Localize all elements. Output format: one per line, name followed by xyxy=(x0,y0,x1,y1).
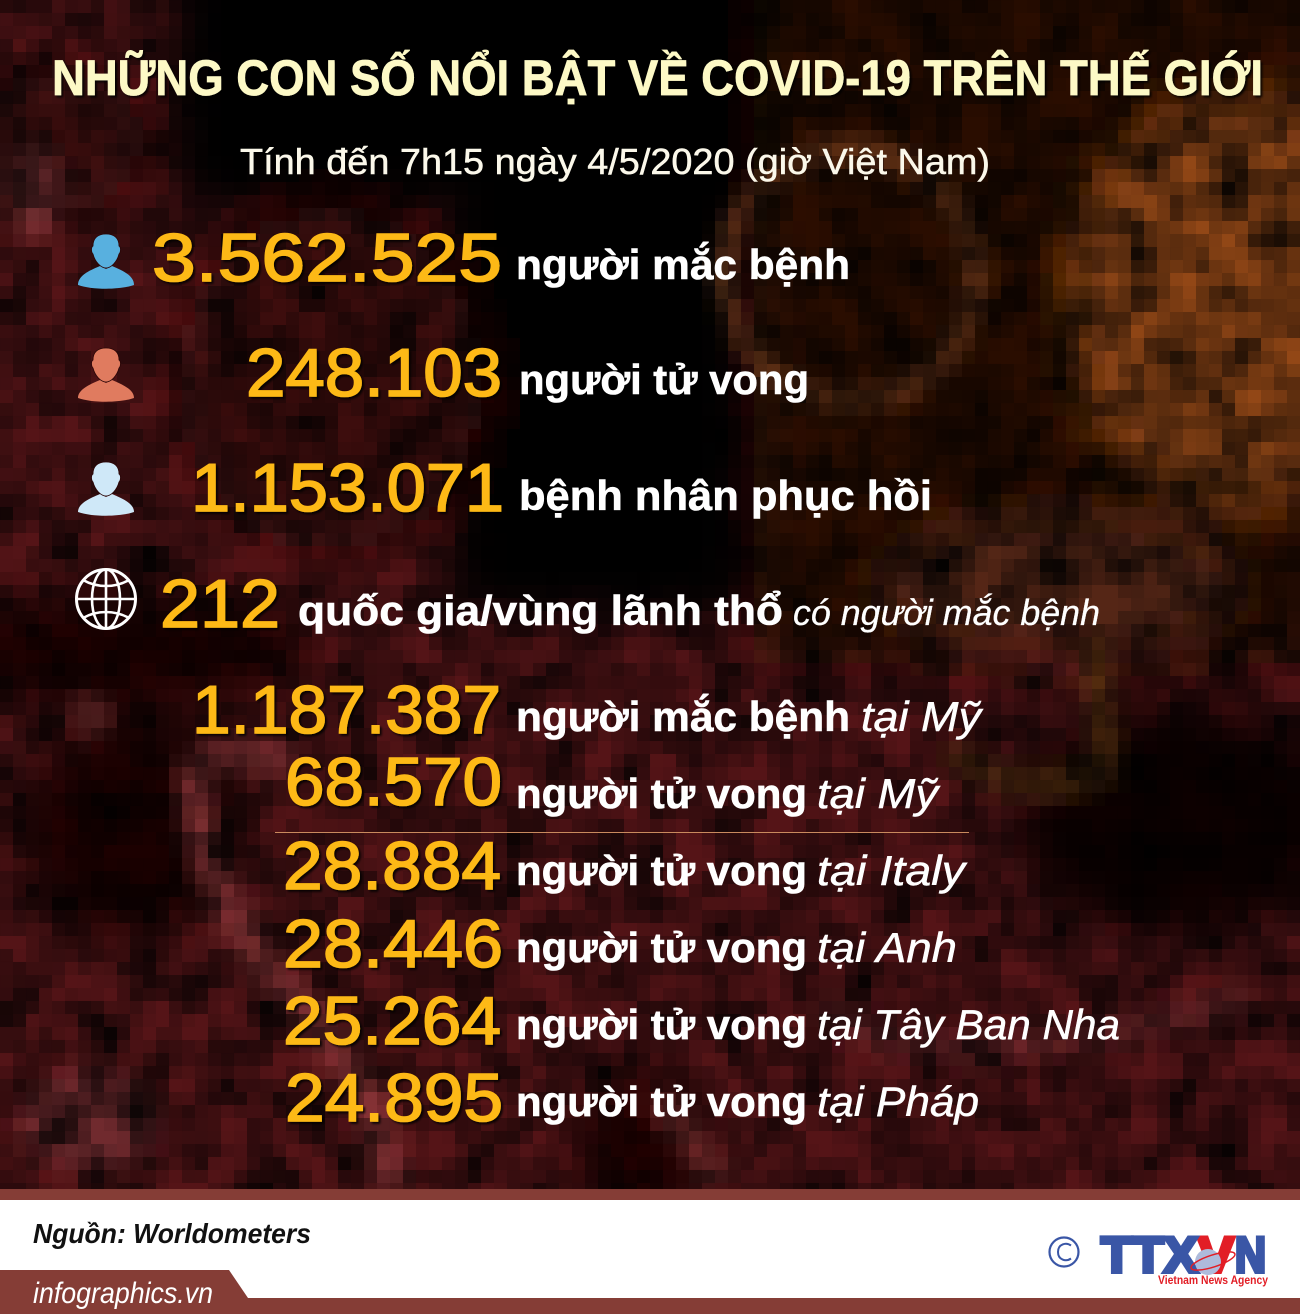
label: Italy: tại Italy xyxy=(817,847,968,894)
label: countries note: có người mắc bệnh xyxy=(793,592,1100,633)
label: recovered: bệnh nhân phục hồi xyxy=(519,472,932,519)
icon: copyright xyxy=(1050,1238,1078,1266)
footer panel xyxy=(0,1200,1300,1314)
number: US cases: 1.187.387 xyxy=(192,672,501,748)
row: US cases xyxy=(192,672,984,748)
row: France deaths xyxy=(285,1060,979,1136)
label: US cases: người mắc bệnh xyxy=(516,692,850,740)
label: France deaths: người tử vong xyxy=(516,1078,807,1125)
number: recovered: 1.153.071 xyxy=(191,450,504,526)
label: US: tại Mỹ xyxy=(817,770,941,817)
icon: blue person xyxy=(78,234,134,289)
footer tab and strip xyxy=(0,1270,1300,1314)
logo: TTXVN: TTX xyxy=(1101,1227,1198,1283)
number: Spain deaths: 25.264 xyxy=(283,983,501,1059)
number: France deaths: 24.895 xyxy=(285,1060,503,1136)
footer band xyxy=(0,1189,1300,1200)
label: deaths: người tử vong xyxy=(519,356,809,403)
label: UK deaths: người tử vong xyxy=(516,924,807,971)
row: global deaths xyxy=(78,335,809,411)
label: France: tại Pháp xyxy=(817,1078,979,1125)
label: cases: người mắc bệnh xyxy=(516,240,850,288)
row: Italy deaths xyxy=(283,828,968,904)
footer xyxy=(0,1189,1300,1314)
label: Italy deaths: người tử vong xyxy=(516,847,807,894)
number: countries: 212 xyxy=(160,566,280,642)
row: US deaths xyxy=(285,744,941,820)
logo: TTXVN: N xyxy=(1235,1227,1266,1283)
number: deaths: 248.103 xyxy=(246,335,502,411)
number: US deaths: 68.570 xyxy=(285,744,502,820)
row: Spain deaths xyxy=(283,983,1120,1059)
label: US: tại Mỹ xyxy=(861,693,984,740)
label: US deaths: người tử vong xyxy=(516,770,807,817)
row: UK deaths xyxy=(283,906,957,982)
subtitle: date: Tính đến 7h15 ngày 4/5/2020 (giờ Việt Nam) xyxy=(240,141,990,182)
number: Italy deaths: 28.884 xyxy=(283,828,501,904)
logo: TTXVN: Vietnam News Agency xyxy=(1158,1275,1269,1287)
icon: globe xyxy=(76,570,136,628)
label: UK: tại Anh xyxy=(817,924,957,971)
logo: TTXVN xyxy=(1101,1227,1269,1287)
number: UK deaths: 28.446 xyxy=(283,906,503,982)
icon: pale blue person xyxy=(78,462,134,516)
label: Spain deaths: người tử vong xyxy=(516,1001,807,1048)
row: countries xyxy=(76,566,1100,642)
row: global cases xyxy=(78,220,850,296)
icon: red person xyxy=(78,348,134,402)
logo: TTXVN: V xyxy=(1198,1227,1235,1283)
label: countries: quốc gia/vùng lãnh thổ xyxy=(298,587,783,634)
number: cases: 3.562.525 xyxy=(152,220,502,296)
row: recovered xyxy=(78,450,932,526)
label: Spain: tại Tây Ban Nha xyxy=(817,1001,1120,1048)
website: infographics.vn xyxy=(33,1277,213,1310)
source: Nguồn: Worldometers xyxy=(33,1218,311,1249)
